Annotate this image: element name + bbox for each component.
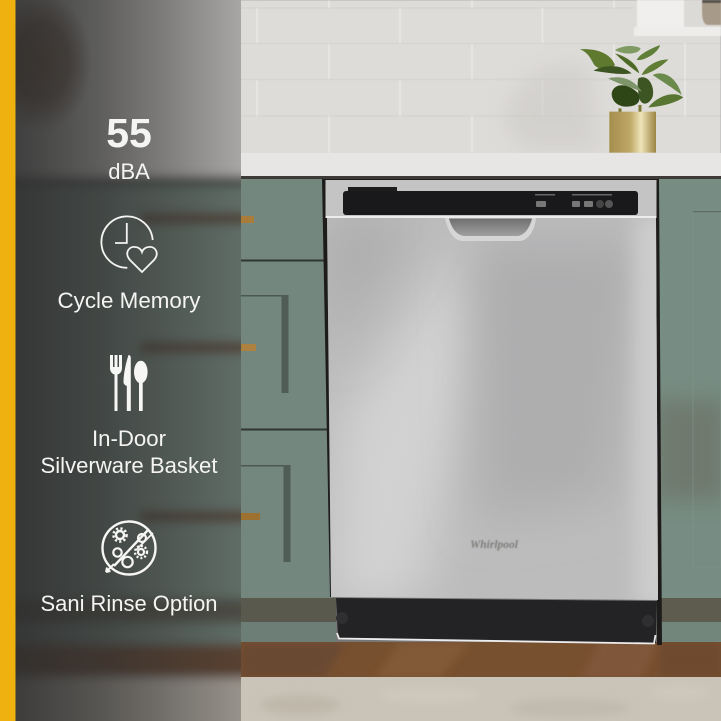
handle (445, 218, 536, 241)
accent bar: yellow (0, 0, 16, 721)
logo: Whirlpool (470, 539, 519, 551)
feature: in-door silverware basket (40, 355, 217, 478)
background: kitchen wall (0, 0, 721, 160)
control panel (326, 180, 656, 218)
dishwasher (322, 179, 675, 645)
panel: blurred dark overlay (16, 0, 241, 721)
stat: 55 dBA: 55 (106, 110, 152, 156)
kick plate (336, 598, 657, 644)
stat: 55 dBA: dBA (108, 159, 150, 184)
toe kick (240, 598, 721, 643)
plant in brass pot (580, 45, 683, 153)
feature: in-door silverware basket: Silverware Basket (40, 453, 217, 478)
feature: sani rinse option (40, 522, 218, 616)
feature: in-door silverware basket: In-Door (92, 426, 166, 451)
cabinets (240, 179, 721, 599)
shelf and vase (634, 0, 721, 36)
feature: cycle memory: Cycle Memory (58, 288, 200, 313)
icon: fork knife spoon (110, 355, 148, 411)
feature: sani rinse option: Sani Rinse Option (40, 591, 218, 616)
icon: crossed-out gears (102, 522, 156, 574)
icon: clock with heart (101, 216, 157, 272)
door panel (325, 216, 675, 610)
stat: 55 dBA (106, 110, 152, 184)
rug (240, 677, 721, 721)
counter top (240, 153, 721, 179)
feature: cycle memory (58, 216, 200, 313)
wood floor (240, 642, 721, 678)
